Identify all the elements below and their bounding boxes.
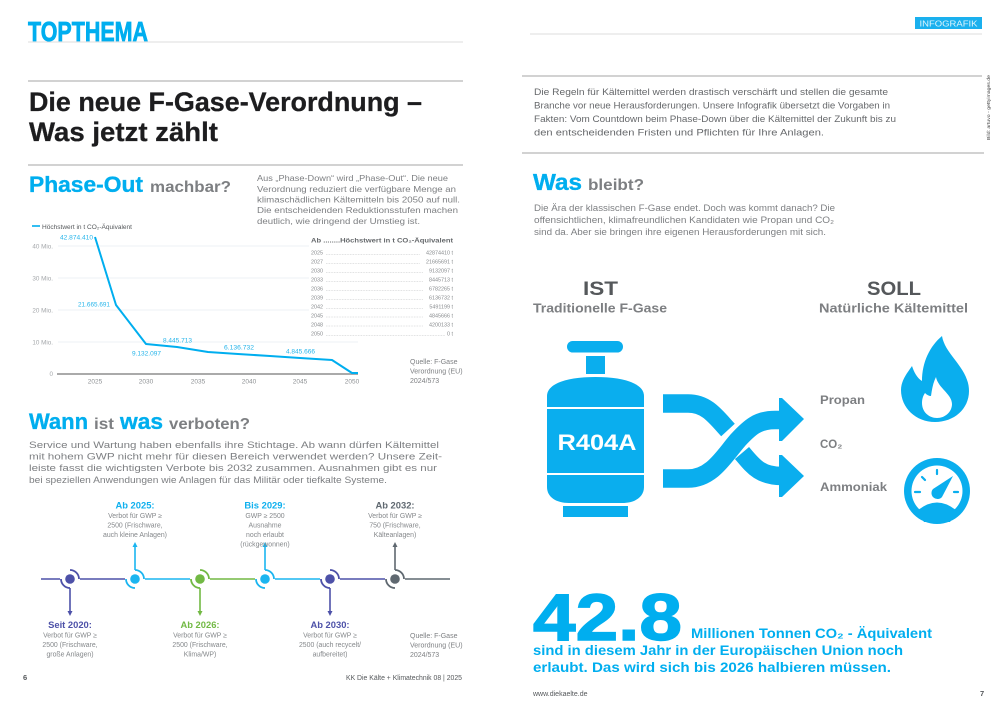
text block: Was bleibt intro: Die Ära der klassischen F-Gase endet. Doch was kommt danach? Die	[534, 203, 835, 213]
heading: Wann ist was verboten: Wann	[29, 409, 88, 434]
table: reduction steps: 6782265 t	[429, 286, 453, 292]
footer: left page: 6	[23, 673, 27, 682]
label: Bis 2029	[240, 500, 290, 548]
main title	[29, 87, 422, 147]
labels: natural refrigerants: CO₂	[820, 439, 842, 451]
text block: phase-out intro: Die entscheidenden Reduktionsstufen machen	[257, 205, 458, 215]
labels: natural refrigerants: Propan	[820, 395, 865, 407]
heading: Wann ist was verboten	[29, 409, 250, 434]
source note: timeline	[410, 633, 463, 659]
icon: flame	[901, 336, 969, 422]
label: Bis 2029: noch erlaubt	[246, 532, 284, 539]
section label: Topthema: TOPTHEMA	[28, 16, 148, 47]
x axis labels: 2025	[88, 378, 103, 386]
icon: gas cylinder R404A	[547, 341, 644, 517]
heading: Phase-Out machbar	[29, 172, 231, 197]
label: Ab 2032: 750 (Frischware,	[369, 522, 421, 530]
label: Bis 2029: (rückgewonnen)	[240, 542, 290, 548]
y axis labels	[32, 244, 53, 378]
table: reduction steps: 4845666 t	[429, 314, 453, 320]
label: Ab 2026	[172, 619, 228, 658]
source note: timeline: Verordnung (EU)	[410, 642, 463, 650]
table: reduction steps: 9132097 t	[429, 268, 453, 274]
label: Ab 2032: Ab 2032:	[375, 500, 415, 510]
main title: Die neue F-Gase-Verordnung –	[29, 87, 422, 117]
badge: Infografik	[915, 17, 982, 29]
text block: phase-out intro	[257, 173, 460, 226]
label: Ab 2025	[103, 500, 167, 539]
footer: right page	[532, 689, 984, 698]
table: reduction steps: 5491199 t	[429, 304, 453, 310]
source note: chart: Quelle: F-Gase	[410, 359, 458, 366]
node: Bis 2029	[256, 542, 274, 588]
y axis labels: 0	[49, 371, 53, 378]
text block: Was bleibt intro: offensichtlichen, klimafreundlichen Kandidaten wie Propan und CO₂	[534, 215, 834, 225]
table: reduction steps	[311, 236, 454, 338]
table: reduction steps: 2050	[311, 332, 323, 338]
callout: CO2 statement: Millionen Tonnen CO₂ - Äquivalent	[691, 625, 932, 641]
big number: 42.8: 42.8	[533, 580, 682, 654]
label: Ab 2026: Ab 2026:	[180, 619, 220, 630]
x axis labels: 2030	[139, 378, 154, 386]
column heading: IST	[533, 279, 667, 316]
y axis labels: 40 Mio.	[32, 244, 53, 250]
node: Ab 2030	[321, 570, 339, 616]
source note: chart	[410, 359, 463, 385]
heading: Was bleibt: bleibt?	[588, 177, 644, 194]
data labels: 21.665.691	[78, 302, 110, 308]
data line	[95, 237, 358, 373]
heading: Was bleibt	[533, 169, 644, 195]
table: reduction steps: Ab ........Höchstwert in t CO₂-Äquivalent	[311, 236, 454, 244]
text block: right page intro: Fakten: Vom Countdown beim Phase-Down über die Kältemittel der Zukunft bis zu	[534, 114, 896, 124]
label: Ab 2030	[299, 619, 361, 658]
data labels: 9.132.097	[132, 350, 161, 358]
text block: phase-out intro: klimaschädlichen Kältemitteln bis 2050 auf null.	[257, 194, 460, 204]
icon: crossing arrows	[663, 398, 804, 497]
label: Ab 2025: 2500 (Frischware,	[107, 522, 163, 530]
text block: right page intro: Branche vor neue Herausforderungen. Unsere Infografik übersetzt die Vorgaben in	[534, 100, 890, 110]
footer: left page	[23, 673, 462, 682]
label: Ab 2032: Kälteanlagen)	[374, 532, 416, 539]
source note: timeline: Quelle: F-Gase	[410, 633, 458, 640]
label: Ab 2026: 2500 (Frischware,	[172, 642, 228, 649]
x axis labels: 2035	[191, 378, 206, 386]
node: Seit 2020	[61, 570, 79, 616]
label: Ab 2032: Verbot für GWP ≥	[368, 513, 422, 520]
chart legend: Höchstwert in t CO₂-Äquivalent	[42, 223, 132, 231]
data labels: 42.874.410	[60, 234, 93, 242]
footer: right page: www.diekaelte.de	[532, 691, 588, 698]
table: reduction steps: 2045	[311, 314, 323, 320]
label: Seit 2020: Seit 2020:	[48, 619, 92, 630]
column heading: SOLL	[819, 279, 968, 316]
labels: natural refrigerants: Ammoniak	[820, 482, 888, 494]
line chart: Höchstwert in t CO2-Äquivalent	[32, 223, 360, 386]
table: reduction steps: 2027	[311, 260, 323, 266]
table: reduction steps: 2048	[311, 322, 323, 328]
callout: CO2 statement	[533, 625, 932, 675]
y axis labels: 20 Mio.	[32, 308, 53, 314]
label: Seit 2020: Verbot für GWP ≥	[43, 632, 97, 640]
table: reduction steps: 4200133 t	[429, 322, 453, 328]
y axis labels: 30 Mio.	[32, 276, 53, 282]
label: Ab 2025: Verbot für GWP ≥	[108, 513, 162, 520]
heading: Wann ist was verboten: verboten?	[169, 416, 250, 433]
text block: Stichtage intro	[29, 440, 442, 485]
text block: Stichtage intro: Service und Wartung haben ebenfalls ihre Stichtage. Ab wann dürfen Kältemittel	[29, 440, 439, 450]
heading: Was bleibt: Was	[533, 169, 582, 195]
label: Seit 2020: große Anlagen)	[46, 652, 94, 658]
label: Ab 2025: auch kleine Anlagen)	[103, 532, 167, 539]
table: reduction steps: 2036	[311, 286, 323, 292]
label: Ab 2026: Verbot für GWP ≥	[173, 632, 227, 640]
heading: Wann ist was verboten: ist	[94, 416, 115, 433]
table: reduction steps: 0 t	[447, 332, 453, 338]
heading: Wann ist was verboten: was	[119, 409, 163, 434]
timeline	[41, 500, 450, 658]
table: reduction steps: 2025	[311, 250, 323, 256]
label: Seit 2020: 2500 (Frischware,	[42, 642, 98, 649]
callout: CO2 statement: sind in diesem Jahr in der Europäischen Union noch	[533, 642, 903, 658]
table: reduction steps: 21665691 t	[426, 260, 453, 266]
badge: Infografik: INFOGRAFIK	[920, 18, 978, 28]
x axis labels: 2040	[242, 378, 257, 386]
label: Ab 2030: Ab 2030:	[310, 619, 350, 630]
text block: phase-out intro: deutlich, wie dringend der Umstieg ist.	[257, 216, 420, 226]
table: reduction steps: 2030	[311, 268, 323, 274]
heading: Phase-Out machbar: machbar?	[150, 179, 231, 196]
y axis labels: 10 Mio.	[32, 340, 53, 346]
table: reduction steps: 6136732 t	[429, 296, 453, 302]
data labels: 8.445.713	[163, 338, 192, 344]
source note: chart: 2024/573	[410, 378, 439, 385]
table: reduction steps: 2033	[311, 278, 323, 284]
node: Ab 2026	[191, 570, 209, 616]
text block: Stichtage intro: leiste fasst die wichtigsten Verbote bis 2032 zusammen. Ausnahmen gibt es nur	[29, 463, 437, 473]
label: Bis 2029: Bis 2029:	[244, 500, 286, 510]
node: Ab 2025	[126, 542, 144, 588]
text block: right page intro: Die Regeln für Kältemittel werden drastisch verschärft und stellen die gesamte	[534, 87, 888, 97]
footer: left page: KK Die Kälte + Klimatechnik 08 | 2025	[346, 675, 462, 682]
data labels: 6.136.732	[224, 344, 254, 352]
label: Ab 2026: Klima/WP)	[184, 652, 216, 658]
text block: Stichtage intro: bei speziellen Anwendungen wie Anlagen für das Militär oder tiefkalte Systeme.	[29, 475, 387, 485]
label: Bis 2029: Ausnahme	[249, 522, 282, 530]
icon: pressure gauge	[904, 458, 970, 524]
main title: Was jetzt zählt	[29, 117, 218, 147]
table: reduction steps: 2042	[311, 304, 323, 310]
text block: Was bleibt intro	[534, 203, 835, 237]
label: Ab 2030: 2500 (auch recycelt/	[299, 642, 361, 649]
label: Ab 2025: Ab 2025:	[115, 500, 155, 510]
table: reduction steps: 8445713 t	[429, 278, 453, 284]
text block: phase-out intro: Verordnung reduziert die verfügbare Menge an	[257, 184, 456, 194]
text block: Was bleibt intro: sind da. Aber sie bringen ihre eigenen Herausforderungen mit sich.	[534, 227, 826, 237]
table: reduction steps: 42874410 t	[426, 250, 453, 256]
table: reduction steps: 2039	[311, 296, 323, 302]
x axis labels: 2045	[293, 378, 308, 386]
node: Ab 2032	[386, 542, 404, 588]
column heading: SOLL: Natürliche Kältemittel	[819, 302, 968, 316]
data labels	[60, 234, 315, 358]
photo credit: Bild: artuvo - gettyimages.de	[986, 75, 992, 140]
labels: natural refrigerants	[820, 395, 888, 494]
label: Ab 2030: Verbot für GWP ≥	[303, 632, 357, 640]
label: Seit 2020	[42, 619, 98, 658]
icon: gas cylinder R404A: R404A	[558, 430, 637, 455]
data labels: 4.845.666	[286, 348, 315, 356]
text block: right page intro: den entscheidenden Fristen und Pflichten für Ihre Anlagen.	[534, 128, 824, 138]
label: Bis 2029: GWP ≥ 2500	[245, 513, 285, 520]
text block: phase-out intro: Aus „Phase-Down“ wird „Phase-Out“. Die neue	[257, 173, 448, 183]
column heading: IST: Traditionelle F-Gase	[533, 302, 667, 316]
callout: CO2 statement: erlaubt. Das wird sich bis 2026 halbieren müssen.	[533, 659, 891, 675]
x axis labels	[88, 378, 360, 386]
label: Ab 2032	[368, 500, 422, 539]
source note: timeline: 2024/573	[410, 652, 439, 659]
heading: Phase-Out machbar: Phase-Out	[29, 172, 144, 197]
source note: chart: Verordnung (EU)	[410, 368, 463, 376]
column heading: SOLL: SOLL	[867, 279, 921, 300]
text block: right page intro	[534, 87, 896, 138]
label: Ab 2030: aufbereitet)	[313, 652, 347, 658]
column heading: IST: IST	[583, 279, 618, 300]
text block: Stichtage intro: mit hohem GWP nicht mehr für diesen Bereich verwendet werden? Unsere Zeit-	[29, 452, 442, 462]
x axis labels: 2050	[345, 378, 360, 386]
footer: right page: 7	[980, 689, 984, 698]
